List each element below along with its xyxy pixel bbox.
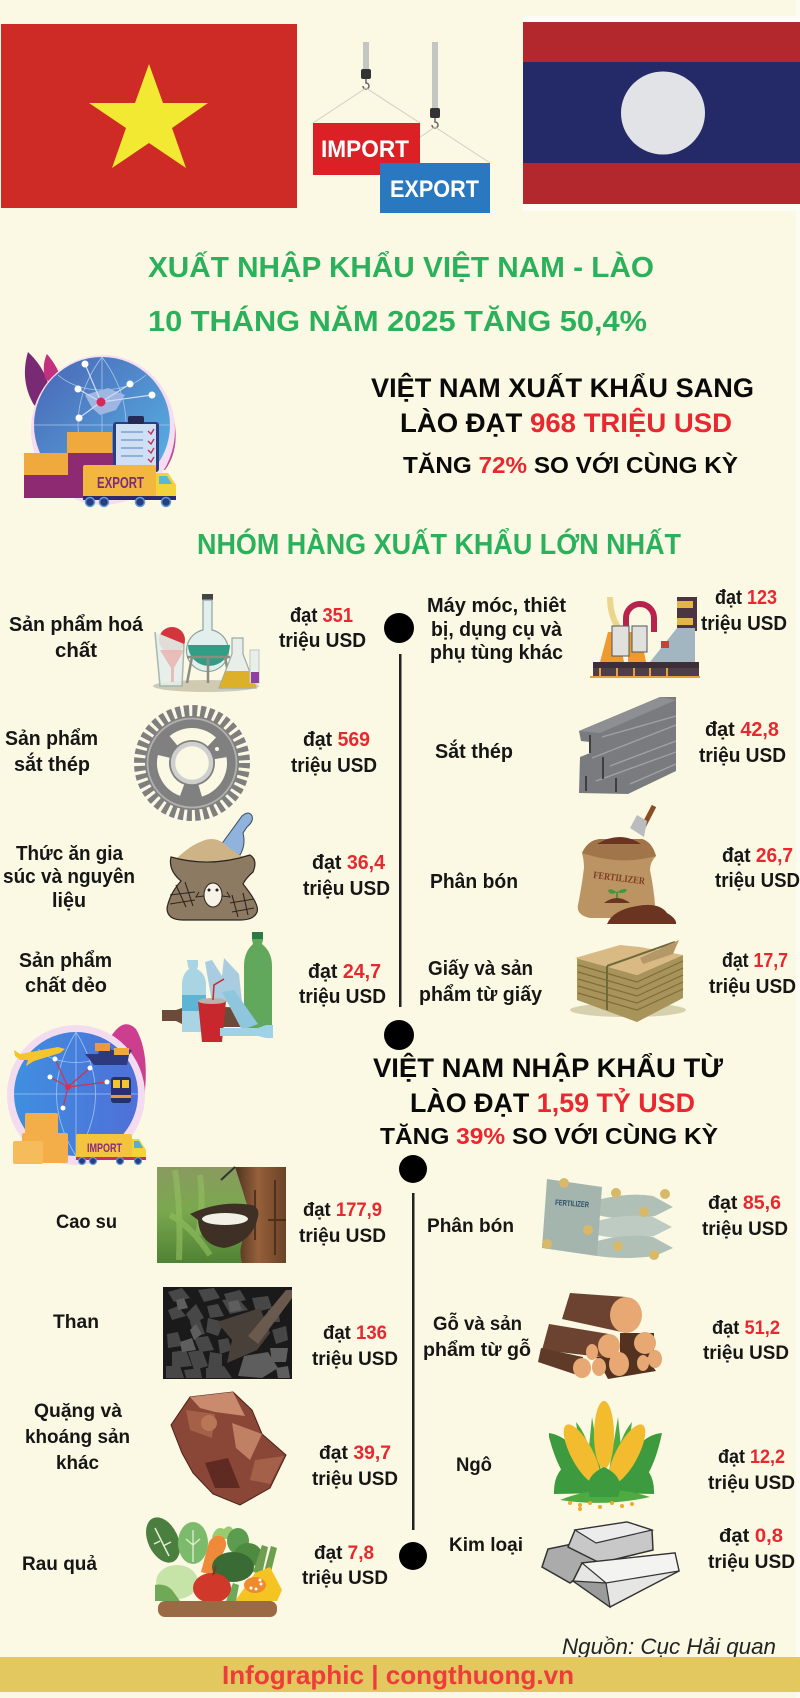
item: plastics: chất dẻo — [25, 975, 107, 997]
item: fruit and vegetables: đạt 7,8 — [314, 1543, 374, 1564]
import summary — [373, 1052, 724, 1149]
item: machinery: bị, dụng cụ và — [431, 619, 563, 641]
item: wood: Gỗ và sản — [433, 1313, 522, 1335]
icon: metal ingots — [542, 1522, 679, 1607]
item: animal feed: Thức ăn gia — [16, 843, 124, 865]
item: iron and steel: đạt 42,8 — [705, 719, 779, 741]
export summary — [371, 372, 754, 478]
icon: gear — [140, 711, 244, 815]
item: corn: đạt 12,2 — [718, 1447, 785, 1468]
flag: Vietnam — [1, 24, 297, 208]
item: fruit and vegetables — [22, 1512, 388, 1617]
item: fertilizer export — [430, 806, 800, 924]
item: chemicals: đạt 351 — [290, 605, 353, 627]
icon: stack of paper — [570, 940, 686, 1022]
icon: steel beams — [579, 697, 676, 794]
item: steel products: triệu USD — [291, 755, 377, 777]
item: chemicals: Sản phẩm hoá — [9, 614, 144, 636]
item: paper: triệu USD — [709, 976, 796, 998]
item: fertilizer export: Phân bón — [430, 871, 518, 893]
item: rubber: đạt 177,9 — [303, 1200, 382, 1221]
item: fertilizer import: triệu USD — [702, 1219, 788, 1240]
export summary: VIỆT NAM XUẤT KHẨU SANG — [371, 372, 754, 403]
item: rubber: triệu USD — [299, 1226, 386, 1247]
item: ores and minerals — [25, 1392, 398, 1505]
item: ores and minerals: Quặng và — [34, 1401, 122, 1422]
item: metal — [449, 1522, 795, 1607]
item: metal: Kim loại — [449, 1535, 523, 1556]
item: paper: Giấy và sản — [428, 958, 533, 980]
item: plastics: triệu USD — [299, 986, 386, 1008]
icon: vegetable crate — [139, 1512, 282, 1617]
icon: import export containers on crane hooks: EXPORT — [390, 176, 479, 203]
item: fertilizer export: đạt 26,7 — [722, 845, 793, 867]
icon: import export containers on crane hooks: IMPORT — [321, 136, 409, 163]
item: plastics: đạt 24,7 — [308, 961, 381, 983]
icon: export globe with truck: EXPORT — [97, 475, 144, 492]
item: wood: phẩm từ gỗ — [423, 1339, 531, 1361]
import summary: TĂNG 39% SO VỚI CÙNG KỲ — [380, 1122, 718, 1149]
export timeline — [384, 613, 414, 1050]
item: metal: triệu USD — [708, 1552, 795, 1573]
icon: log pile — [538, 1293, 662, 1379]
icon: fertilizer bag: FERTILIZER — [593, 870, 646, 887]
item: animal feed: triệu USD — [303, 878, 390, 900]
icon: plastic bottles and cup — [162, 932, 273, 1042]
title: 10 THÁNG NĂM 2025 TĂNG 50,4% — [148, 306, 647, 338]
item: fruit and vegetables: Rau quả — [22, 1554, 97, 1575]
item: corn: Ngô — [456, 1455, 492, 1476]
item: ores and minerals: khác — [56, 1453, 99, 1474]
icon: fertilizer sacks — [542, 1178, 673, 1260]
icon: import globe with transport: IMPORT — [87, 1141, 122, 1155]
footer band: Infographic | congthuong.vn — [222, 1660, 574, 1690]
item: coal: Than — [53, 1312, 99, 1333]
item: steel products: Sản phẩm — [5, 728, 98, 750]
photo: coal and shovel — [163, 1287, 292, 1379]
item: ores and minerals: khoáng sản — [25, 1427, 130, 1448]
icon: corn ears — [549, 1401, 662, 1511]
export summary: TĂNG 72% SO VỚI CÙNG KỲ — [403, 451, 738, 478]
icon: feed sack with scoop — [167, 813, 257, 920]
item: rubber — [56, 1167, 386, 1263]
import timeline — [399, 1155, 427, 1570]
item: iron and steel — [435, 697, 786, 794]
item: coal: đạt 136 — [323, 1323, 387, 1344]
item: animal feed: liệu — [52, 890, 86, 912]
photo: rubber latex cup on tree — [157, 1167, 286, 1263]
icon: factory machine — [590, 597, 700, 678]
item: iron and steel: Sắt thép — [435, 739, 513, 763]
item: plastics: Sản phẩm — [19, 950, 112, 972]
item: coal: triệu USD — [312, 1349, 398, 1370]
icon: fertilizer bag — [578, 806, 676, 924]
import summary: VIỆT NAM NHẬP KHẨU TỪ — [373, 1052, 724, 1083]
item: wood — [423, 1293, 789, 1379]
title: XUẤT NHẬP KHẨU VIỆT NAM - LÀO — [148, 252, 654, 284]
icon: import globe with transport — [7, 1024, 146, 1165]
item: machinery: triệu USD — [701, 613, 787, 635]
item: wood: triệu USD — [703, 1343, 789, 1364]
item: fertilizer import — [427, 1178, 788, 1260]
item: chemicals: chất — [55, 640, 97, 662]
icon: laboratory glassware — [153, 594, 259, 692]
item: steel products: sắt thép — [14, 752, 90, 776]
flag: Laos — [523, 16, 800, 211]
item: fertilizer import: Phân bón — [427, 1216, 514, 1237]
item: fruit and vegetables: triệu USD — [302, 1568, 388, 1589]
item: ores and minerals: đạt 39,7 — [319, 1443, 391, 1464]
item: coal — [53, 1287, 398, 1379]
item: plastics — [19, 932, 386, 1042]
title — [148, 252, 654, 338]
item: metal: đạt 0,8 — [719, 1526, 783, 1547]
item: fertilizer import: đạt 85,6 — [708, 1193, 781, 1214]
item: machinery: phụ tùng khác — [430, 642, 563, 664]
item: corn — [456, 1401, 795, 1511]
item: animal feed — [3, 813, 390, 920]
source note: Nguồn: Cục Hải quan — [562, 1634, 776, 1659]
icon: ore rock — [171, 1392, 286, 1505]
icon: export globe with truck — [24, 352, 176, 506]
footer band — [0, 1657, 800, 1692]
item: ores and minerals: triệu USD — [312, 1469, 398, 1490]
item: steel products: đạt 569 — [303, 729, 370, 751]
item: chemicals — [9, 594, 366, 692]
item: machinery: Máy móc, thiêt — [427, 595, 566, 617]
item: machinery: đạt 123 — [715, 587, 777, 609]
item: paper — [419, 940, 796, 1022]
item: animal feed: đạt 36,4 — [312, 852, 386, 874]
item: paper: đạt 17,7 — [722, 950, 788, 972]
item: animal feed: súc và nguyên — [3, 866, 135, 888]
item: wood: đạt 51,2 — [712, 1318, 780, 1339]
item: iron and steel: triệu USD — [699, 745, 786, 767]
item: rubber: Cao su — [56, 1212, 117, 1233]
item: chemicals: triệu USD — [279, 630, 366, 652]
icon: fertilizer sacks: FERTILIZER — [555, 1198, 590, 1209]
item: steel products — [5, 711, 377, 815]
export summary: LÀO ĐẠT 968 TRIỆU USD — [400, 407, 732, 438]
item: corn: triệu USD — [708, 1473, 795, 1494]
item: machinery — [427, 587, 787, 678]
heading: largest export groups: NHÓM HÀNG XUẤT KHẨU LỚN NHẤT — [197, 529, 682, 561]
icon: import export containers on crane hooks — [313, 42, 490, 213]
item: paper: phẩm từ giấy — [419, 984, 543, 1006]
import summary: LÀO ĐẠT 1,59 TỶ USD — [410, 1086, 695, 1118]
